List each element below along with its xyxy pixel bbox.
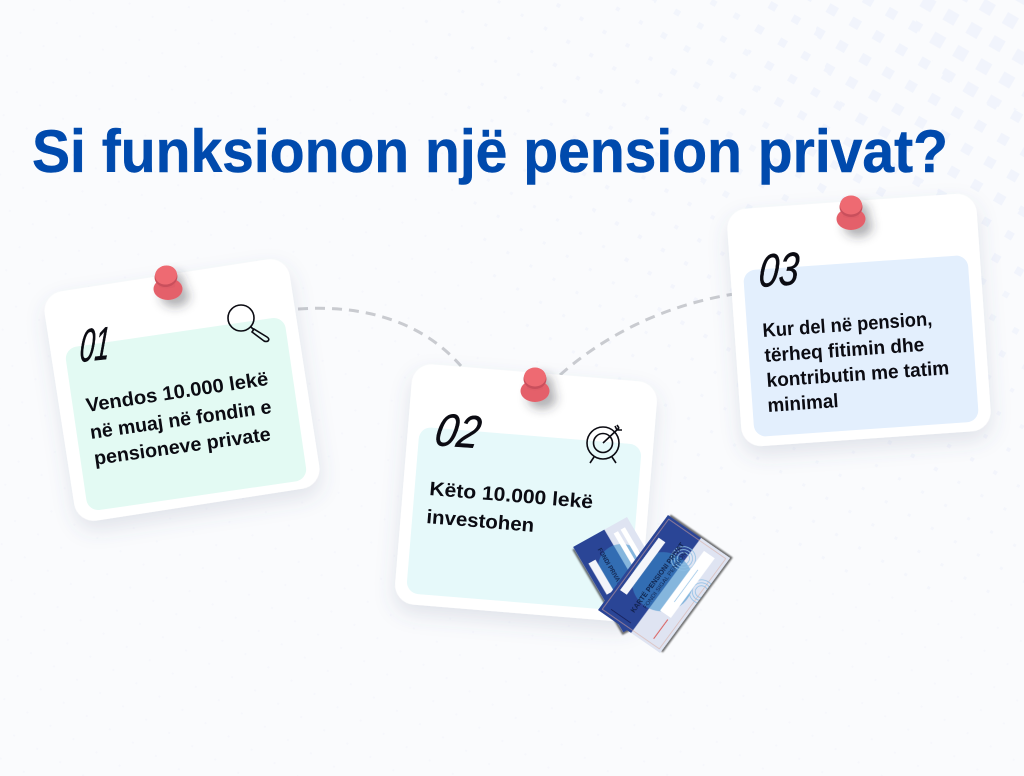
icon: red pin <box>153 264 182 300</box>
pension cards image <box>573 515 737 658</box>
step 03 text: minimal <box>767 390 839 417</box>
step 02 text: investohen <box>426 506 535 537</box>
step 03 text <box>762 308 950 417</box>
number 01: 01 <box>78 317 112 372</box>
step 03 text: kontributin me tatim <box>766 357 950 392</box>
front pension card <box>598 515 737 658</box>
title: Si funksionon një pension privat? <box>32 118 948 185</box>
card 03 background <box>726 193 992 447</box>
panel: step 01 <box>42 256 322 524</box>
number 03: 03 <box>757 242 801 297</box>
card 03 tinted area <box>743 255 979 437</box>
icon: target <box>587 425 622 463</box>
panel: step 03 <box>726 193 992 447</box>
back pension card: FONDI PRIVAT <box>596 547 622 586</box>
number 02: 02 <box>431 404 486 458</box>
step 01 text: pensioneve private <box>93 423 272 470</box>
panel: step 02 <box>394 363 658 623</box>
card 02 background <box>394 363 658 623</box>
card 02 tinted area <box>406 427 642 611</box>
step 02 text <box>426 478 594 537</box>
step 01 text <box>84 368 273 470</box>
icon: magnifying glass <box>228 305 269 342</box>
card 01 tinted area <box>64 316 308 512</box>
back pension card <box>572 517 644 636</box>
icon: red pin <box>836 196 866 230</box>
step 01 text: në muaj në fondin e <box>89 396 273 444</box>
icon: red pin <box>520 368 550 402</box>
step 01 text: Vendos 10.000 lekë <box>84 368 270 417</box>
front pension card: KARTË PENSIONI PRIVAT <box>629 541 687 614</box>
step 02 text: Këto 10.000 lekë <box>429 478 594 513</box>
card 01 background <box>42 256 322 524</box>
arrow: dashed connector 01 to 02 <box>298 308 461 366</box>
step 03 text: Kur del në pension, <box>762 308 933 342</box>
front pension card: FONDI SIGAL PENSION <box>643 551 689 610</box>
arrow: dashed connector 02 to 03 <box>560 294 734 375</box>
step 03 text: tërheq fitimin dhe <box>764 334 925 367</box>
